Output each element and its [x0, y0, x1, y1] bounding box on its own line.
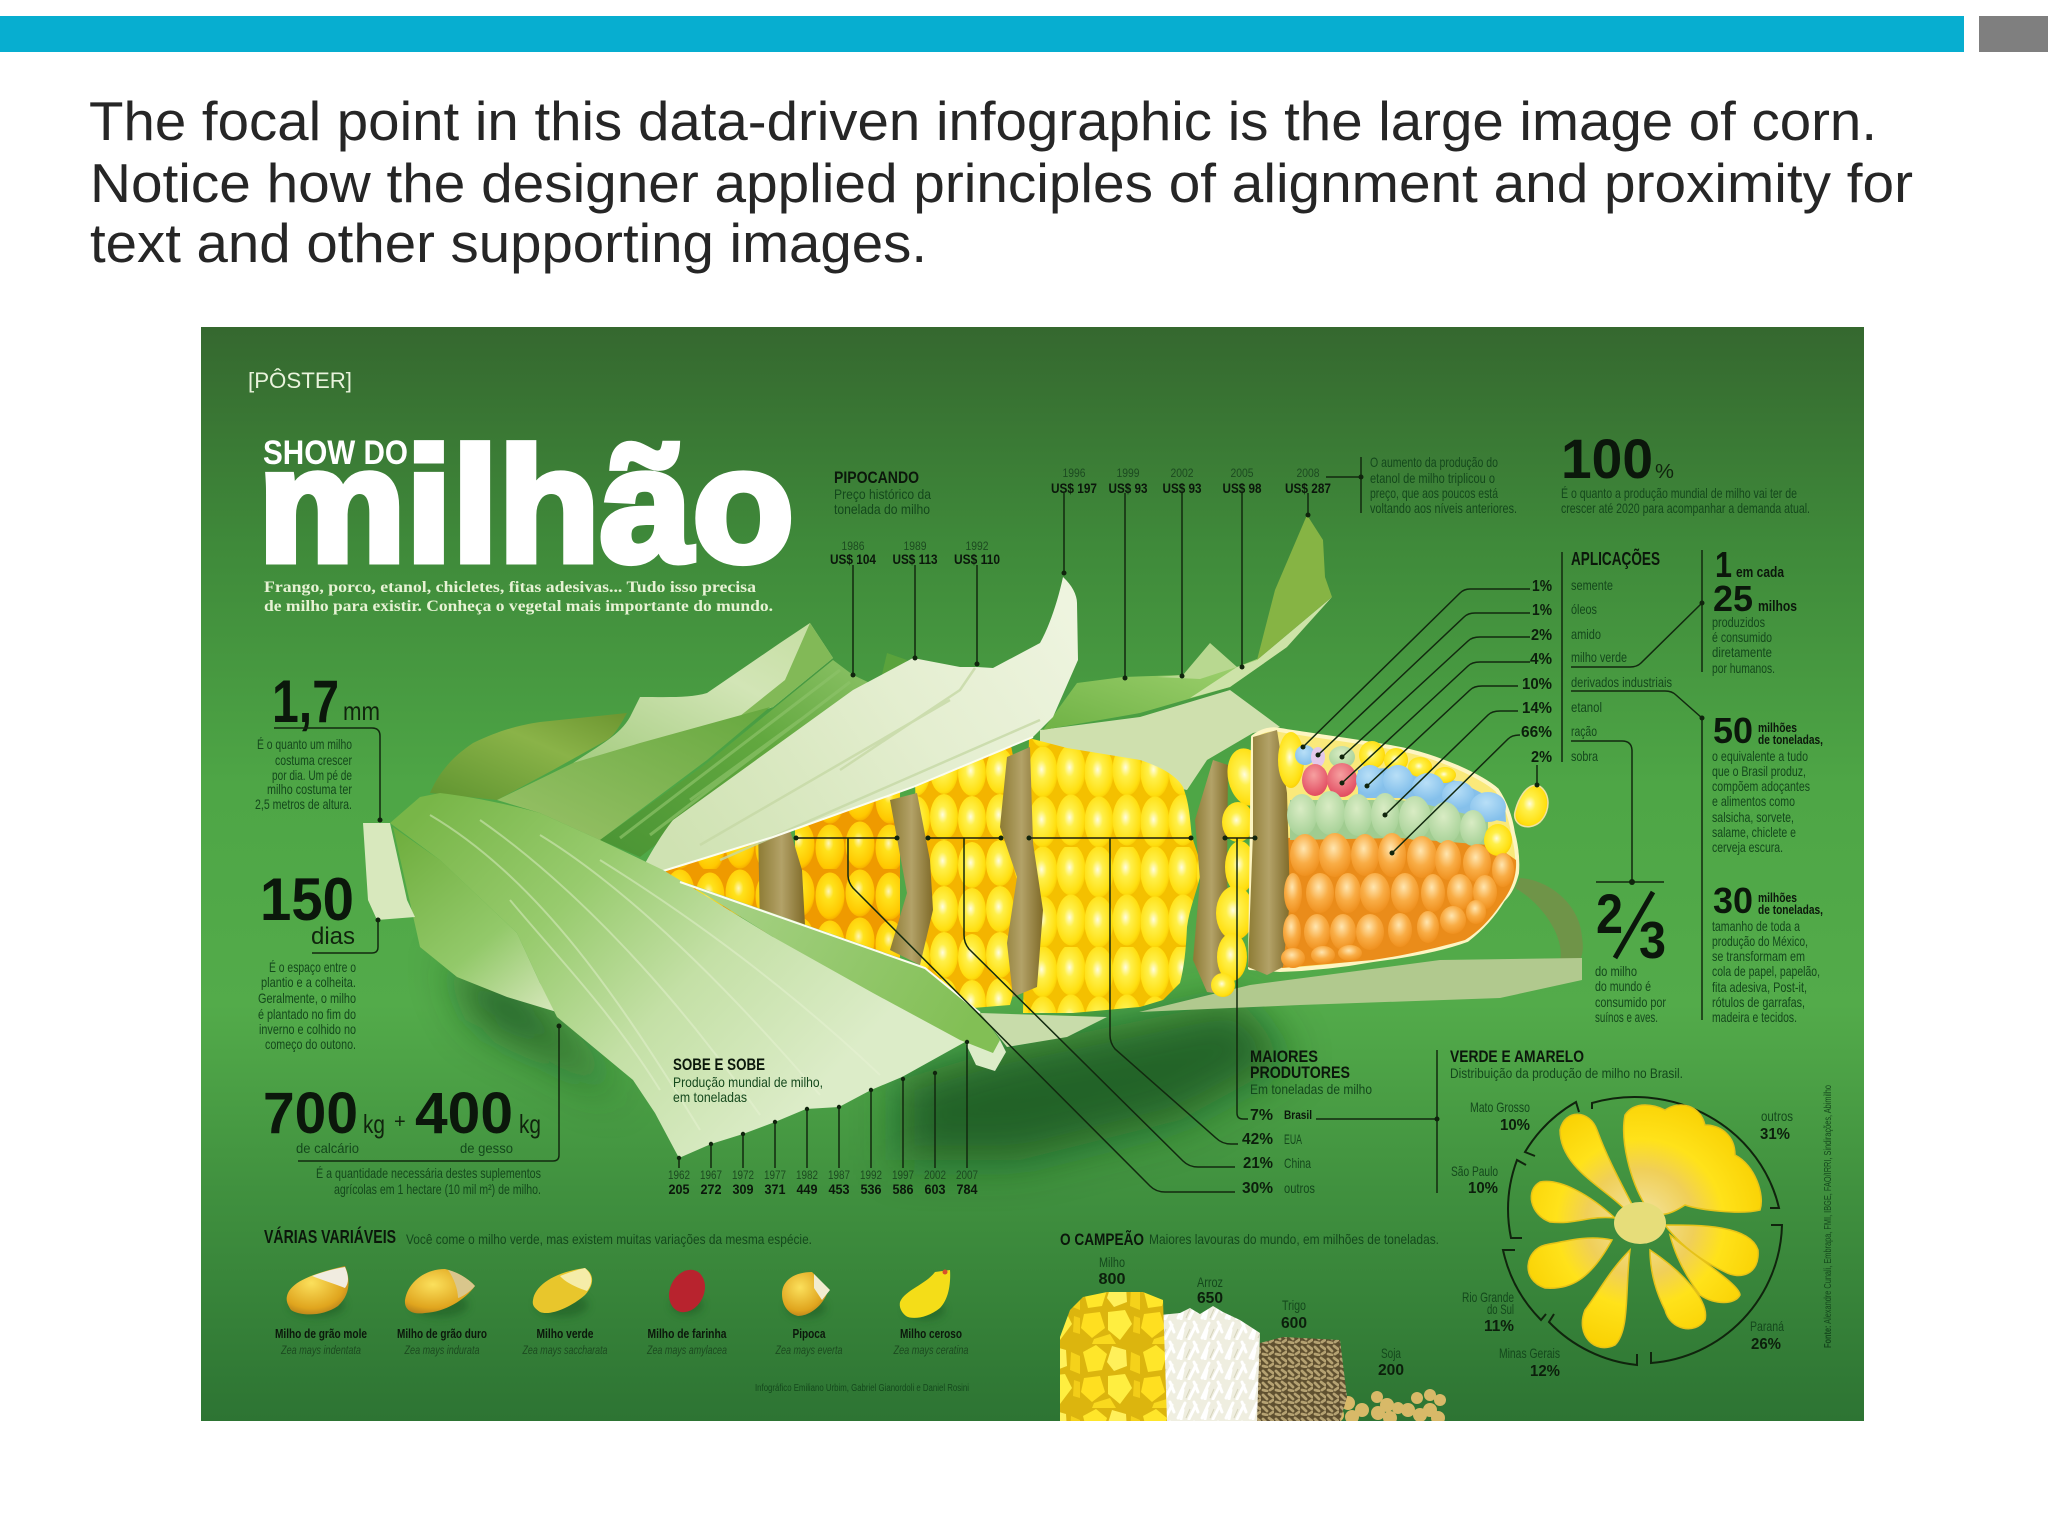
food labels: Soja — [1381, 1345, 1401, 1361]
food block: milho — [1060, 1292, 1167, 1421]
fact: 150 dias: começo do outono. — [265, 1036, 356, 1052]
fact: 30 milhoes de toneladas: 30 — [1713, 880, 1753, 921]
chart: Maiores produtores: EUA — [1284, 1131, 1302, 1147]
chart: Maiores produtores: China — [1284, 1155, 1311, 1171]
slide title: text and other supporting images. — [90, 212, 927, 274]
fact: 1,7 mm: milho costuma ter — [267, 781, 352, 797]
fact: 2/3: 3 — [1639, 912, 1666, 970]
poster deck — [264, 579, 773, 615]
fact: 1 em cada 25 milhos: diretamente — [1712, 644, 1772, 660]
food labels: Arroz — [1197, 1274, 1223, 1290]
chart: Sobe e sobe: 453 — [828, 1181, 850, 1197]
chart: Aplicacoes: APLICAÇÕES — [1571, 548, 1660, 569]
chart: O campeao: O CAMPEÃO — [1060, 1229, 1144, 1249]
chart: Sobe e sobe: 603 — [924, 1181, 946, 1197]
chart: Aplicacoes: ração — [1571, 723, 1597, 739]
section: Varias variaveis: Zea mays everta — [775, 1343, 843, 1357]
pale upper leaf — [573, 623, 833, 763]
icon: milho ceroso — [900, 1270, 950, 1318]
fact: 1,7 mm: É o quanto um milho — [257, 736, 352, 752]
dark back leaf — [430, 713, 627, 800]
husk behind the tip — [1040, 690, 1280, 790]
corn flower pie — [1528, 1105, 1761, 1348]
corn axis lines to producers — [794, 836, 1258, 1192]
chart: Aplicacoes: 2% — [1531, 627, 1552, 644]
fact: 1 em cada 25 milhos: produzidos — [1712, 614, 1765, 630]
chart: Sobe e sobe: 1997 — [892, 1168, 914, 1182]
state labels: Paraná — [1750, 1318, 1784, 1334]
chart: O campeao: 800 — [1098, 1271, 1126, 1288]
credits: Infográfico Emiliano Urbim, Gabriel Gianordoli e Daniel Rosini — [755, 1383, 969, 1394]
chart: Sobe e sobe: 2007 — [956, 1168, 978, 1182]
corn tip slice — [664, 820, 765, 930]
fact: 30 milhoes de toneladas: madeira e tecidos. — [1712, 1009, 1797, 1025]
price timeline: Pipocando: voltando aos níveis anteriores. — [1370, 500, 1517, 516]
fact: 50 milhoes de toneladas: e alimentos como — [1712, 793, 1795, 809]
fact: 1,7 mm: 2,5 metros de altura. — [255, 796, 352, 812]
chart: Maiores produtores — [1242, 1047, 1440, 1197]
fact: 700 kg + 400 kg: É a quantidade necessária destes suplementos — [316, 1165, 541, 1181]
fact: 150 dias: Geralmente, o milho — [258, 990, 356, 1006]
fact: 150 dias: é plantado no fim do — [258, 1006, 356, 1022]
chart: Aplicacoes: milho verde — [1571, 649, 1627, 665]
fact: 700 kg + 400 kg: kg — [519, 1109, 541, 1139]
fact: 100%: 100 — [1561, 427, 1653, 490]
fact: 2/3: 2 — [1596, 882, 1623, 945]
fact: 1 em cada 25 milhos: 25 — [1713, 578, 1753, 619]
kernel names: Pipoca — [792, 1326, 826, 1341]
husk leaves in front of the corn — [363, 577, 1078, 1158]
section: Varias variaveis: Zea mays indentata — [280, 1343, 361, 1357]
sources, vertical: Fonte: Alexandre Cunali, Embrapa, FMI, IBGE, FAO/IRRI, Sindirações, Abimilho — [1823, 1085, 1834, 1348]
chart: Sobe e sobe: 1962 — [668, 1168, 690, 1182]
price timeline: Pipocando: US$ 110 — [954, 551, 1000, 567]
state labels: São Paulo — [1451, 1163, 1498, 1179]
fact: 700 kg + 400 kg: de calcário — [296, 1140, 359, 1156]
chart: Sobe e sobe: 309 — [732, 1181, 754, 1197]
chart: Verde e amarelo: Distribuição da produção de milho no Brasil. — [1450, 1065, 1683, 1081]
poster headline: SHOW DO — [263, 434, 408, 472]
fact: 150 dias: 150 — [260, 866, 354, 933]
middle green leaf — [497, 707, 770, 840]
fact: 150 dias: inverno e colhido no — [259, 1021, 356, 1037]
icon: pipoca — [782, 1272, 830, 1316]
white lower husk edge — [680, 882, 980, 1013]
corn slice five kernels — [1211, 745, 1272, 997]
section: Varias variaveis — [264, 1226, 969, 1357]
poster deck: de milho para existir. Conheça o vegetal mais importante do mundo. — [264, 598, 773, 615]
pale top leaf — [643, 577, 1078, 871]
fact: 50 milhoes de toneladas: cerveja escura. — [1712, 839, 1783, 855]
fact: 30 milhoes de toneladas: fita adesiva, Post-it, — [1712, 979, 1807, 995]
chart: Verde e amarelo: 12% — [1530, 1363, 1560, 1380]
price timeline: Pipocando: tonelada do milho — [834, 501, 930, 517]
price timeline: Pipocando: 1996 — [1062, 466, 1086, 480]
state labels: outros — [1761, 1108, 1793, 1124]
fact: 30 milhoes de toneladas: rótulos de garrafas, — [1712, 994, 1805, 1010]
price timeline: Pipocando: preço, que aos poucos está — [1370, 485, 1498, 501]
chart: Aplicacoes: amido — [1571, 626, 1601, 642]
green backing — [1290, 800, 1488, 845]
husk leaves behind the corn — [430, 515, 1583, 1047]
section: Varias variaveis: Você come o milho verde, mas existem muitas variações da mesma espécie. — [406, 1231, 812, 1247]
orange backing — [1282, 832, 1516, 968]
chart: Sobe e sobe: 272 — [700, 1181, 722, 1197]
slide title: Notice how the designer applied principles of alignment and proximity for — [90, 152, 1913, 214]
chart: Verde e amarelo: 10% — [1500, 1117, 1530, 1134]
blue backing — [1358, 767, 1506, 822]
chart: O campeao: Maiores lavouras do mundo, em milhões de toneladas. — [1149, 1231, 1439, 1247]
chart: O campeao: 600 — [1281, 1315, 1307, 1332]
kernels: derivados industriais (blue) — [1356, 765, 1506, 822]
chart: Aplicacoes — [1300, 548, 1672, 856]
fact: 700 kg + 400 kg: 400 — [415, 1081, 513, 1146]
price timeline: Pipocando: 2005 — [1230, 466, 1254, 480]
chart: Aplicacoes: 1% — [1532, 578, 1552, 595]
fact: 30 milhoes de toneladas: se transformam em — [1712, 948, 1805, 964]
price timeline: Pipocando: 1986 — [842, 539, 865, 553]
chart: Maiores produtores: 21% — [1243, 1155, 1273, 1172]
chart: O campeao: 200 — [1378, 1362, 1404, 1379]
fact: 50 milhoes de toneladas: que o Brasil produz, — [1712, 763, 1806, 779]
price timeline: Pipocando — [830, 454, 1517, 680]
poster panel — [201, 327, 1864, 1425]
chart: Aplicacoes: 4% — [1530, 651, 1552, 668]
kernels: milho verde (red) — [1302, 763, 1357, 797]
chart: Sobe e sobe — [668, 1040, 978, 1197]
loose kernel: sobra — [1515, 785, 1548, 827]
fact: 700 kg + 400 kg: de gesso — [460, 1140, 513, 1156]
kernel names: Milho ceroso — [900, 1326, 962, 1341]
corn slice three — [915, 740, 1040, 1008]
right top leaf — [1043, 647, 1287, 730]
fact: 50 milhoes de toneladas: de toneladas, — [1758, 732, 1823, 747]
chart: Maiores produtores: 30% — [1242, 1180, 1273, 1197]
chart: Sobe e sobe: em toneladas — [673, 1089, 747, 1105]
kernels: etanol (green) — [1287, 791, 1486, 846]
chart: Aplicacoes: 66% — [1521, 724, 1552, 741]
price timeline: Pipocando: US$ 104 — [830, 551, 876, 567]
fact: 1 em cada 25 milhos: por humanos. — [1712, 660, 1775, 676]
fact: 700 kg + 400 kg: agrícolas em 1 hectare (10 mil m²) de milho. — [334, 1181, 541, 1197]
chart: Aplicacoes: 2% — [1531, 749, 1552, 766]
fact: 150 dias: plantio e a colheita. — [261, 974, 356, 990]
section: Varias variaveis: Zea mays ceratina — [893, 1343, 969, 1357]
yellow rim kernels — [1278, 732, 1512, 856]
right stem leaf — [1500, 878, 1583, 990]
main front leaf — [390, 793, 1006, 1158]
illustration: sliced corn cob — [664, 729, 1548, 1013]
fact: 1 em cada 25 milhos: 1 — [1715, 544, 1732, 585]
chart: Maiores produtores: MAIORES — [1250, 1047, 1318, 1066]
fact: 1 em cada 25 milhos — [1712, 544, 1797, 676]
price timeline: Pipocando: PIPOCANDO — [834, 468, 919, 487]
price timeline: Pipocando: O aumento da produção do — [1370, 454, 1498, 470]
poster headline: milhão — [258, 415, 794, 596]
silk band left of the colored slice — [1248, 730, 1290, 975]
chart: Sobe e sobe: 371 — [764, 1181, 786, 1197]
fact: 100% — [1561, 427, 1810, 516]
fact: 150 dias — [258, 866, 380, 1052]
icon: milho verde — [533, 1268, 592, 1313]
fact: 1 em cada 25 milhos: milhos — [1758, 598, 1797, 615]
price timeline: Pipocando: US$ 113 — [892, 551, 938, 567]
chart: Sobe e sobe: 205 — [668, 1181, 690, 1197]
kernel names: Milho de grão mole — [275, 1326, 367, 1341]
chart: O campeao — [1060, 1229, 1446, 1425]
price timeline: Pipocando: Preço histórico da — [834, 486, 931, 502]
chart: Sobe e sobe: 1987 — [828, 1168, 850, 1182]
chart: Sobe e sobe: 449 — [796, 1181, 818, 1197]
poster tag: [PÔSTER] — [248, 368, 352, 393]
price timeline: Pipocando: US$ 93 — [1162, 480, 1202, 496]
chart: Verde e amarelo: 11% — [1484, 1318, 1514, 1335]
price timeline: Pipocando: 1989 — [904, 539, 927, 553]
fact: 2/3: do milho — [1595, 963, 1637, 979]
price timeline: Pipocando: US$ 98 — [1222, 480, 1262, 496]
fact: 2/3: do mundo é — [1595, 978, 1651, 994]
food block: arroz — [1160, 1306, 1260, 1421]
fact: 700 kg + 400 kg — [263, 1024, 562, 1197]
fact: 700 kg + 400 kg: + — [394, 1111, 406, 1133]
fact: 2/3 — [1571, 741, 1666, 1025]
grey corner block — [1979, 16, 2048, 52]
kernel names: Milho verde — [536, 1326, 594, 1341]
chart: Aplicacoes: óleos — [1571, 601, 1597, 617]
price timeline: Pipocando: 1999 — [1116, 466, 1140, 480]
ring of arcs — [1503, 1097, 1782, 1365]
state labels: Mato Grosso — [1470, 1099, 1530, 1115]
chart: Sobe e sobe: SOBE E SOBE — [673, 1055, 765, 1074]
chart: Verde e amarelo — [1450, 1047, 1793, 1380]
fact: 1,7 mm — [255, 668, 382, 822]
food labels: Milho — [1099, 1254, 1125, 1270]
state labels: do Sul — [1487, 1301, 1514, 1317]
price timeline: Pipocando: US$ 287 — [1285, 480, 1331, 496]
fact: 700 kg + 400 kg: 700 — [263, 1081, 358, 1146]
fact: 150 dias: É o espaço entre o — [269, 959, 356, 975]
fact: 1,7 mm: costuma crescer — [275, 752, 352, 768]
fact: 1,7 mm: mm — [343, 696, 380, 726]
chart: Sobe e sobe: 1967 — [700, 1168, 722, 1182]
fact: 30 milhoes de toneladas: de toneladas, — [1758, 902, 1823, 917]
fact: 100%: crescer até 2020 para acompanhar a demanda atual. — [1561, 500, 1810, 516]
price timeline: Pipocando: US$ 197 — [1051, 480, 1097, 496]
chart: Sobe e sobe: 1972 — [732, 1168, 754, 1182]
chart: Maiores produtores: 7% — [1250, 1107, 1273, 1124]
fact: 150 dias: dias — [311, 923, 355, 950]
chart: O campeao: 650 — [1197, 1290, 1223, 1307]
leader lines to kernels — [1300, 589, 1540, 856]
fact: 30 milhoes de toneladas: produção do México, — [1712, 933, 1808, 949]
chart: Maiores produtores: Brasil — [1284, 1108, 1312, 1122]
fact: 1,7 mm: por dia. Um pé de — [272, 767, 352, 783]
fact: 100%: % — [1655, 461, 1674, 483]
striped dark green band — [600, 660, 870, 857]
chart: Sobe e sobe: 1992 — [860, 1168, 882, 1182]
kernel names: Milho de grão duro — [397, 1326, 487, 1341]
fact: 50 milhoes de toneladas: salame, chiclete e — [1712, 824, 1796, 840]
top accent bar — [0, 16, 1964, 52]
fact: 30 milhoes de toneladas: tamanho de toda a — [1712, 918, 1800, 934]
food block: soja — [1340, 1389, 1446, 1421]
state labels: Rio Grande — [1462, 1289, 1514, 1305]
chart: Maiores produtores: Em toneladas de milho — [1250, 1081, 1372, 1097]
chart: Sobe e sobe: 586 — [892, 1181, 914, 1197]
fact: 30 milhoes de toneladas — [1712, 880, 1823, 1025]
fact: 100%: É o quanto a produção mundial de milho vai ter de — [1561, 485, 1797, 501]
chart: Sobe e sobe: Produção mundial de milho, — [673, 1074, 823, 1090]
state labels: Minas Gerais — [1499, 1345, 1560, 1361]
chart: Aplicacoes: sobra — [1571, 748, 1598, 764]
kernels: semente, oleos, amido — [1295, 745, 1355, 768]
chart: Aplicacoes: 1% — [1532, 602, 1552, 619]
fact: 50 milhoes de toneladas — [1712, 710, 1823, 855]
icon: milho de grao duro — [405, 1269, 475, 1313]
leaf stripes — [430, 815, 880, 1130]
chart: Aplicacoes: semente — [1571, 577, 1613, 593]
price timeline: Pipocando: 2008 — [1296, 466, 1320, 480]
colored slice base — [1250, 729, 1517, 970]
slide title — [89, 90, 1913, 274]
chart: Verde e amarelo: 26% — [1751, 1336, 1781, 1353]
chart: Sobe e sobe: 536 — [860, 1181, 882, 1197]
chart: Maiores produtores: outros — [1284, 1180, 1315, 1196]
section: Varias variaveis: Zea mays saccharata — [522, 1343, 608, 1357]
corn slice four — [1023, 738, 1202, 1013]
fact: 2/3: consumido por — [1595, 994, 1666, 1010]
price timeline: Pipocando: US$ 93 — [1108, 480, 1148, 496]
chart: Verde e amarelo: VERDE E AMARELO — [1450, 1047, 1584, 1066]
chart: Aplicacoes: etanol — [1571, 699, 1602, 715]
chart: Sobe e sobe: 1982 — [796, 1168, 818, 1182]
fact: 50 milhoes de toneladas: compõem adoçantes — [1712, 778, 1810, 794]
bright inner fold — [687, 883, 1000, 1053]
price timeline: Pipocando: 2002 — [1170, 466, 1194, 480]
knot of husk — [363, 823, 415, 920]
fact: 2/3: suínos e aves. — [1595, 1009, 1658, 1025]
fact: 50 milhoes de toneladas: o equivalente a tudo — [1712, 748, 1808, 764]
fact: 1 em cada 25 milhos: em cada — [1736, 564, 1785, 581]
kernel names: Milho de farinha — [648, 1326, 727, 1341]
kernel names — [275, 1326, 962, 1341]
slide title: The focal point in this data-driven infographic is the large image of corn. — [89, 90, 1877, 152]
fact: 30 milhoes de toneladas: cola de papel, papelão, — [1712, 963, 1820, 979]
food block: trigo — [1253, 1337, 1347, 1421]
fact: 1 em cada 25 milhos: é consumido — [1712, 629, 1772, 645]
icon: milho de grao mole — [287, 1266, 349, 1314]
food labels — [1099, 1254, 1401, 1361]
poster deck: Frango, porco, etanol, chicletes, fitas adesivas... Tudo isso precisa — [264, 579, 756, 596]
white husk edge — [663, 737, 1033, 871]
chart: Maiores produtores: PRODUTORES — [1250, 1063, 1350, 1082]
lower-left fold of main leaf — [393, 827, 560, 1013]
section: Varias variaveis: Zea mays indurata — [404, 1343, 480, 1357]
chart: Sobe e sobe: 2002 — [924, 1168, 946, 1182]
section: Varias variaveis: VÁRIAS VARIÁVEIS — [264, 1226, 396, 1247]
kernels: racao (orange) — [1281, 833, 1514, 968]
chart: Sobe e sobe: 784 — [956, 1181, 978, 1197]
chart: Aplicacoes: 10% — [1522, 676, 1552, 693]
kernel shadows — [289, 1293, 945, 1320]
icon: milho de farinha — [662, 1264, 712, 1318]
chart: Aplicacoes: 14% — [1522, 700, 1552, 717]
food labels: Trigo — [1282, 1297, 1306, 1313]
leaf shadow — [450, 960, 1290, 1160]
fact: 50 milhoes de toneladas: salsicha, sorvete, — [1712, 809, 1794, 825]
fact: 700 kg + 400 kg: kg — [363, 1109, 385, 1139]
chart: Aplicacoes: derivados industriais — [1571, 674, 1672, 690]
chart: Verde e amarelo: 10% — [1468, 1180, 1498, 1197]
chart: Verde e amarelo: 31% — [1760, 1126, 1790, 1143]
fact: 50 milhoes de toneladas: 50 — [1713, 710, 1753, 751]
price timeline: Pipocando: etanol de milho triplicou o — [1370, 470, 1495, 486]
price timeline: Pipocando: 1992 — [966, 539, 989, 553]
state labels — [1451, 1099, 1793, 1361]
fact: 30 milhoes de toneladas: milhões — [1758, 890, 1797, 905]
chart: Maiores produtores: 42% — [1242, 1131, 1273, 1148]
fact: 50 milhoes de toneladas: milhões — [1758, 720, 1797, 735]
section: Varias variaveis: Zea mays amylacea — [646, 1343, 727, 1357]
fact column: 1 em 25, 50, 30 — [1571, 544, 1823, 1025]
fact: 1,7 mm: 1,7 — [272, 668, 339, 735]
silk bands between slices — [758, 747, 1230, 997]
corn slice two — [795, 770, 900, 975]
chart: Sobe e sobe: 1977 — [764, 1168, 786, 1182]
